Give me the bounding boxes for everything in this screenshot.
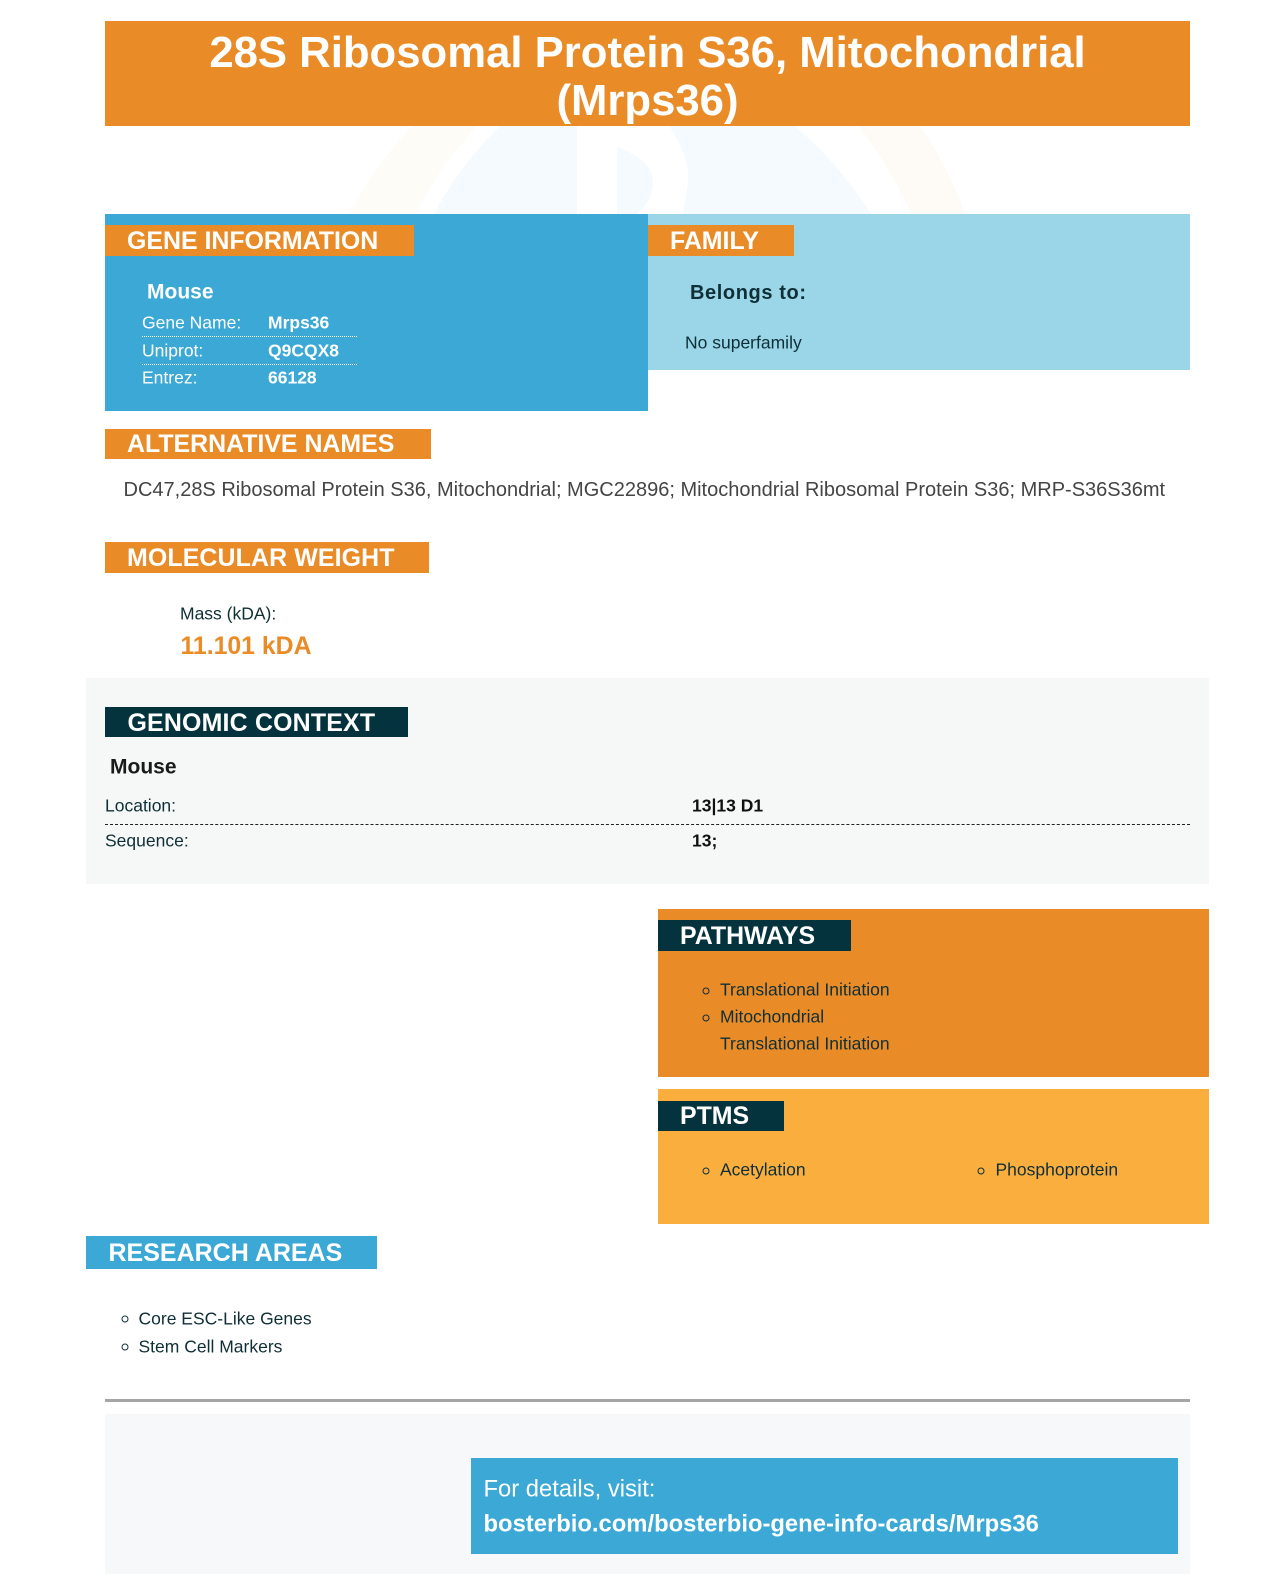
belongs to label: Belongs to: xyxy=(690,282,807,304)
bullet marker xyxy=(121,1344,128,1350)
location label: Location: xyxy=(105,796,176,816)
sequence value: 13; xyxy=(692,830,717,850)
heading: molecular weight xyxy=(105,542,429,573)
panel: family xyxy=(648,214,1190,370)
panel: genomic context xyxy=(86,678,1209,884)
background watermark logo xyxy=(434,126,964,214)
title text xyxy=(209,28,1086,125)
ptm item: Acetylation xyxy=(720,1159,806,1179)
heading: gene information xyxy=(105,225,414,256)
heading text: molecular weight: MOLECULAR WEIGHT xyxy=(127,544,395,572)
ptm item: Phosphoprotein xyxy=(996,1159,1118,1179)
heading text: gene information: GENE INFORMATION xyxy=(127,227,378,255)
heading: pathways xyxy=(658,920,851,951)
research area item: Core ESC-Like Genes xyxy=(138,1308,312,1328)
title banner xyxy=(105,21,1190,126)
heading: research areas xyxy=(86,1236,376,1268)
heading: alternative names xyxy=(105,429,431,459)
no superfamily text: No superfamily xyxy=(685,332,802,352)
entrez row: 66128 xyxy=(268,367,317,387)
bullet marker xyxy=(702,1168,710,1174)
gene name row: Gene Name: xyxy=(142,312,241,332)
panel: footer xyxy=(105,1414,1190,1574)
bullet marker xyxy=(702,988,710,994)
pathway item: Mitochondrial xyxy=(720,1006,824,1026)
heading: genomic context xyxy=(105,707,408,737)
uniprot row: Uniprot: xyxy=(142,340,203,360)
mass label: Mass (kDA): xyxy=(180,604,276,624)
gene name row: Mrps36 xyxy=(268,312,329,332)
heading text: pathways: PATHWAYS xyxy=(680,922,815,950)
panel: pathways xyxy=(658,909,1209,1077)
callout: details link xyxy=(471,1458,1178,1554)
heading text: research areas: RESEARCH AREAS xyxy=(108,1238,342,1266)
bullet marker xyxy=(978,1168,984,1174)
panel: gene information xyxy=(105,214,648,411)
gene name row xyxy=(142,310,357,337)
title text: 28S Ribosomal Protein S36, Mitochondrial xyxy=(209,28,1086,77)
bullet marker xyxy=(702,1014,710,1022)
title text: (Mrps36) xyxy=(556,76,739,125)
heading text: ptms: PTMS xyxy=(680,1102,749,1130)
mass value: 11.101 kDA xyxy=(180,633,311,660)
heading: ptms xyxy=(658,1101,784,1131)
species: mouse: Mouse xyxy=(147,280,214,303)
species: mouse: Mouse xyxy=(110,755,177,778)
bullet marker xyxy=(121,1316,128,1322)
heading text: alternative names: ALTERNATIVE NAMES xyxy=(127,430,394,458)
alternative names text: DC47,28S Ribosomal Protein S36, Mitochondrial; MGC22896; Mitochondrial Ribosomal Protein S36; MRP-S36S36mt xyxy=(124,479,1165,501)
pathway item continuation: Translational Initiation xyxy=(720,1034,890,1054)
callout url: bosterbio.com/bosterbio-gene-info-cards/Mrps36 xyxy=(484,1511,1039,1538)
callout label: For details, visit: xyxy=(484,1475,655,1502)
heading text: family: FAMILY xyxy=(670,227,759,255)
entrez row: Entrez: xyxy=(142,367,197,387)
uniprot row: Q9CQX8 xyxy=(268,340,339,360)
uniprot row xyxy=(142,337,357,364)
panel: ptms xyxy=(658,1088,1209,1224)
heading: family xyxy=(648,225,794,256)
research area item: Stem Cell Markers xyxy=(138,1336,282,1356)
sequence label: Sequence: xyxy=(105,830,189,850)
entrez row xyxy=(142,367,317,387)
location value: 13|13 D1 xyxy=(692,796,763,816)
heading text: genomic context: GENOMIC CONTEXT xyxy=(128,709,375,737)
pathway item: Translational Initiation xyxy=(720,980,890,1000)
